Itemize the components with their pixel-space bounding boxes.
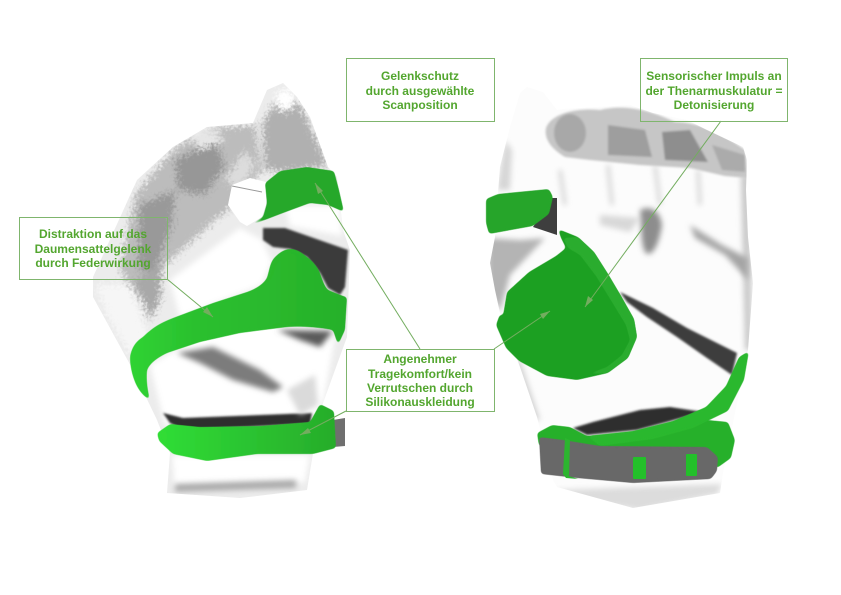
- callout: Distraktion: durch Federwirkung: [35, 256, 151, 270]
- dark forearm band: [620, 292, 737, 375]
- callout: Sensorischer Impuls: Sensorischer Impuls an: [646, 69, 782, 83]
- callout: Distraktion: Daumensattelgelenk: [35, 242, 152, 256]
- callout: Gelenkschutz: [346, 58, 494, 122]
- callout: Sensorischer Impuls: der Thenarmuskulatur =: [645, 84, 783, 98]
- strap loop 1: [563, 438, 578, 479]
- white palm areas: [150, 206, 342, 488]
- thenar cup lighter edge: [563, 237, 637, 375]
- callout: Gelenkschutz: Gelenkschutz: [381, 69, 459, 83]
- right hand green diagonal strap: [587, 351, 749, 446]
- callout: Angenehmer Tragekomfort: Silikonauskleidung: [365, 395, 475, 409]
- callout: Distraktion: [20, 218, 168, 280]
- callout: Gelenkschutz: durch ausgewählte: [366, 84, 475, 98]
- callout: Sensorischer Impuls: Detonisierung: [674, 98, 754, 112]
- infographic canvas: [19, 58, 788, 508]
- fingertips grey shading: [546, 108, 748, 178]
- callout: Angenehmer Tragekomfort: Verrutschen durch: [367, 381, 473, 395]
- fingers grey shading: [95, 88, 328, 355]
- dark wrist shadow: [573, 407, 703, 435]
- strap loop 2: [633, 457, 646, 479]
- callout: Angenehmer Tragekomfort: [346, 350, 494, 412]
- left hand green spring strap: [130, 249, 347, 400]
- left hand model: [93, 83, 350, 498]
- arrowheads: [203, 183, 593, 435]
- left hand green wrist strap: [157, 404, 336, 461]
- left hand green thumb band: [244, 167, 344, 228]
- callout: Gelenkschutz: Scanposition: [382, 98, 458, 112]
- right hand green thenar cup: [496, 229, 637, 380]
- callout: Sensorischer Impuls: [640, 58, 788, 122]
- right hand green thumb band: [486, 189, 553, 234]
- leader lines and arrows: [167, 121, 721, 435]
- strap loop 3: [686, 454, 697, 476]
- callout: Angenehmer Tragekomfort: Angenehmer: [383, 352, 457, 366]
- grey connector behind left wrist strap: [333, 418, 345, 447]
- thumb opening: [228, 178, 266, 226]
- callout: Distraktion: Distraktion auf das: [39, 227, 147, 241]
- right hand grey buckle strap: [539, 437, 718, 483]
- dark shadow bands: [163, 228, 348, 430]
- dark connector behind thumb band: [533, 198, 557, 235]
- right hand model: [488, 87, 753, 510]
- callout: Angenehmer Tragekomfort: Tragekomfort/kein: [368, 367, 472, 381]
- right hand green wrist strap, back part: [537, 420, 735, 468]
- palm crease shading: [600, 208, 748, 280]
